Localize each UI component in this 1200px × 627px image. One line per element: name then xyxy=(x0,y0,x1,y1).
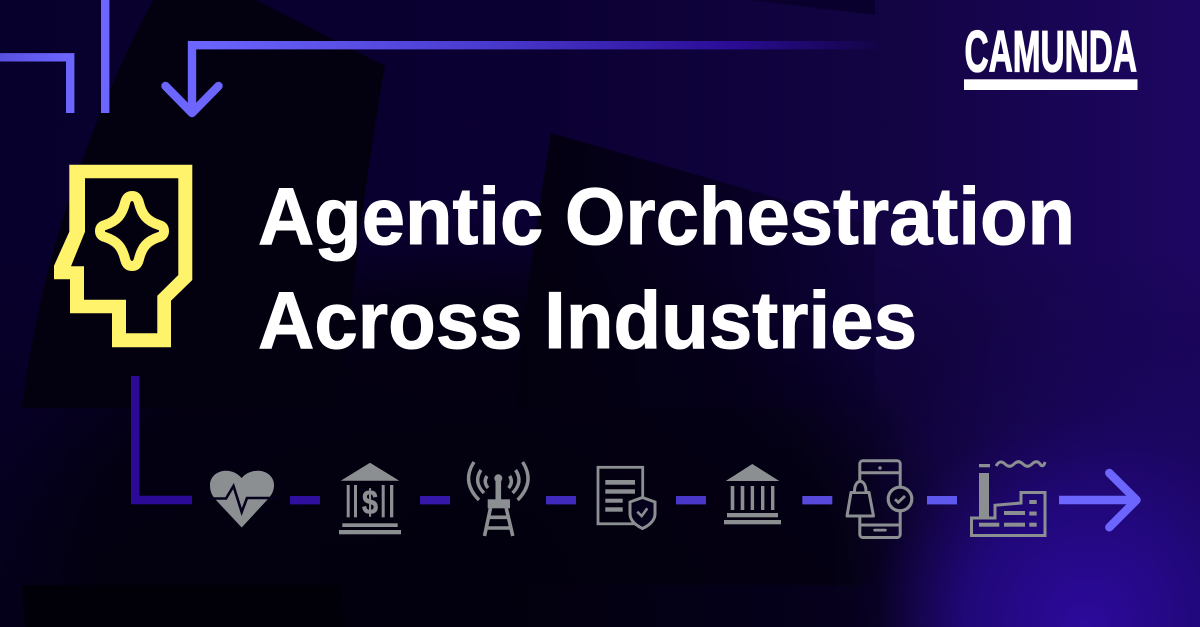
icon: banking dollar: $ xyxy=(362,484,378,522)
connector: dash 4 xyxy=(676,496,706,504)
connector: dash 3 xyxy=(546,496,576,504)
icon: government building xyxy=(724,464,781,524)
title: Across Industries xyxy=(258,276,917,366)
connector: dash 6 xyxy=(927,496,957,504)
title: Agentic Orchestration xyxy=(258,172,1075,262)
connector: vertical line xyxy=(101,0,109,113)
connector: dash 2 xyxy=(420,496,450,504)
icon: telecom tower xyxy=(469,462,528,536)
arrow: right end of icon row xyxy=(1059,473,1136,527)
icon: banking dollar xyxy=(339,463,401,534)
icon: healthcare heart xyxy=(206,471,278,528)
arrow: top line pointing down to head icon xyxy=(166,45,885,113)
icon: head with sparkle xyxy=(54,165,192,347)
connector: line from head to icon row xyxy=(135,376,192,500)
connector: dash 1 xyxy=(290,496,320,504)
icon: manufacturing factory xyxy=(972,462,1045,536)
title xyxy=(258,172,1075,366)
icon: retail phone with shopping bag xyxy=(847,461,912,538)
connector: left elbow line xyxy=(0,57,70,113)
logo: Camunda xyxy=(964,19,1138,90)
icon: insurance document with shield xyxy=(598,467,655,528)
connector: dash 5 xyxy=(802,496,832,504)
